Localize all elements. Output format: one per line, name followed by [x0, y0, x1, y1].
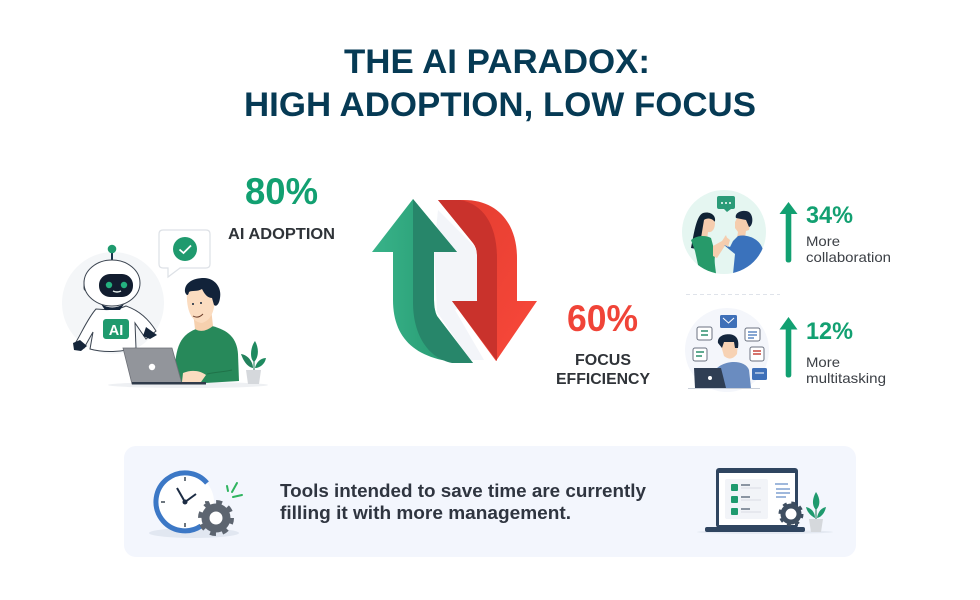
icon: clock and gear	[149, 473, 242, 538]
red down arrow	[438, 200, 537, 361]
takeaway text	[280, 481, 646, 523]
arrow up: collaboration	[780, 202, 798, 262]
stat: 34% more collaboration: collaboration	[806, 249, 891, 265]
panel: takeaway	[124, 446, 856, 557]
laptop	[123, 348, 206, 384]
stat: 80% AI adoption: 80%	[245, 171, 318, 212]
robot	[73, 245, 157, 352]
illustration: man multitasking	[685, 308, 769, 392]
center arrows: up and down	[372, 199, 537, 363]
man	[174, 278, 239, 383]
title: HIGH ADOPTION, LOW FOCUS	[244, 86, 756, 124]
arrow up: multitasking	[780, 317, 798, 378]
stat: 34% more collaboration	[806, 202, 891, 265]
stat: 12% more multitasking	[806, 318, 886, 386]
title: THE AI PARADOX:	[344, 43, 650, 81]
gear	[200, 502, 232, 534]
man	[735, 218, 750, 237]
stat: 60% focus efficiency	[556, 298, 650, 388]
green up arrow	[372, 199, 473, 363]
stat: 34% more collaboration: More	[806, 233, 840, 249]
title	[244, 43, 756, 124]
robot: AI	[109, 323, 123, 339]
stat: 60% focus efficiency: FOCUS	[575, 352, 631, 369]
stat: 12% more multitasking: More	[806, 354, 840, 370]
stat: 80% AI adoption	[228, 171, 335, 243]
takeaway text: filling it with more management.	[280, 503, 571, 523]
takeaway text: Tools intended to save time are currently	[280, 481, 646, 501]
stat: 34% more collaboration: 34%	[806, 202, 853, 229]
icon: laptop with checklist, gear and plant	[697, 468, 833, 534]
stat: 12% more multitasking: multitasking	[806, 370, 886, 386]
stat: 80% AI adoption: AI ADOPTION	[228, 226, 335, 243]
stat: 60% focus efficiency: EFFICIENCY	[556, 371, 650, 388]
speech bubble with check	[159, 230, 210, 277]
stat: 12% more multitasking: 12%	[806, 318, 853, 345]
illustration: robot and man at laptop	[62, 230, 268, 388]
stat: 60% focus efficiency: 60%	[567, 298, 638, 339]
woman	[691, 213, 715, 250]
illustration: two people collaborating	[682, 190, 766, 274]
message bubbles	[693, 315, 767, 380]
plant	[241, 341, 266, 384]
